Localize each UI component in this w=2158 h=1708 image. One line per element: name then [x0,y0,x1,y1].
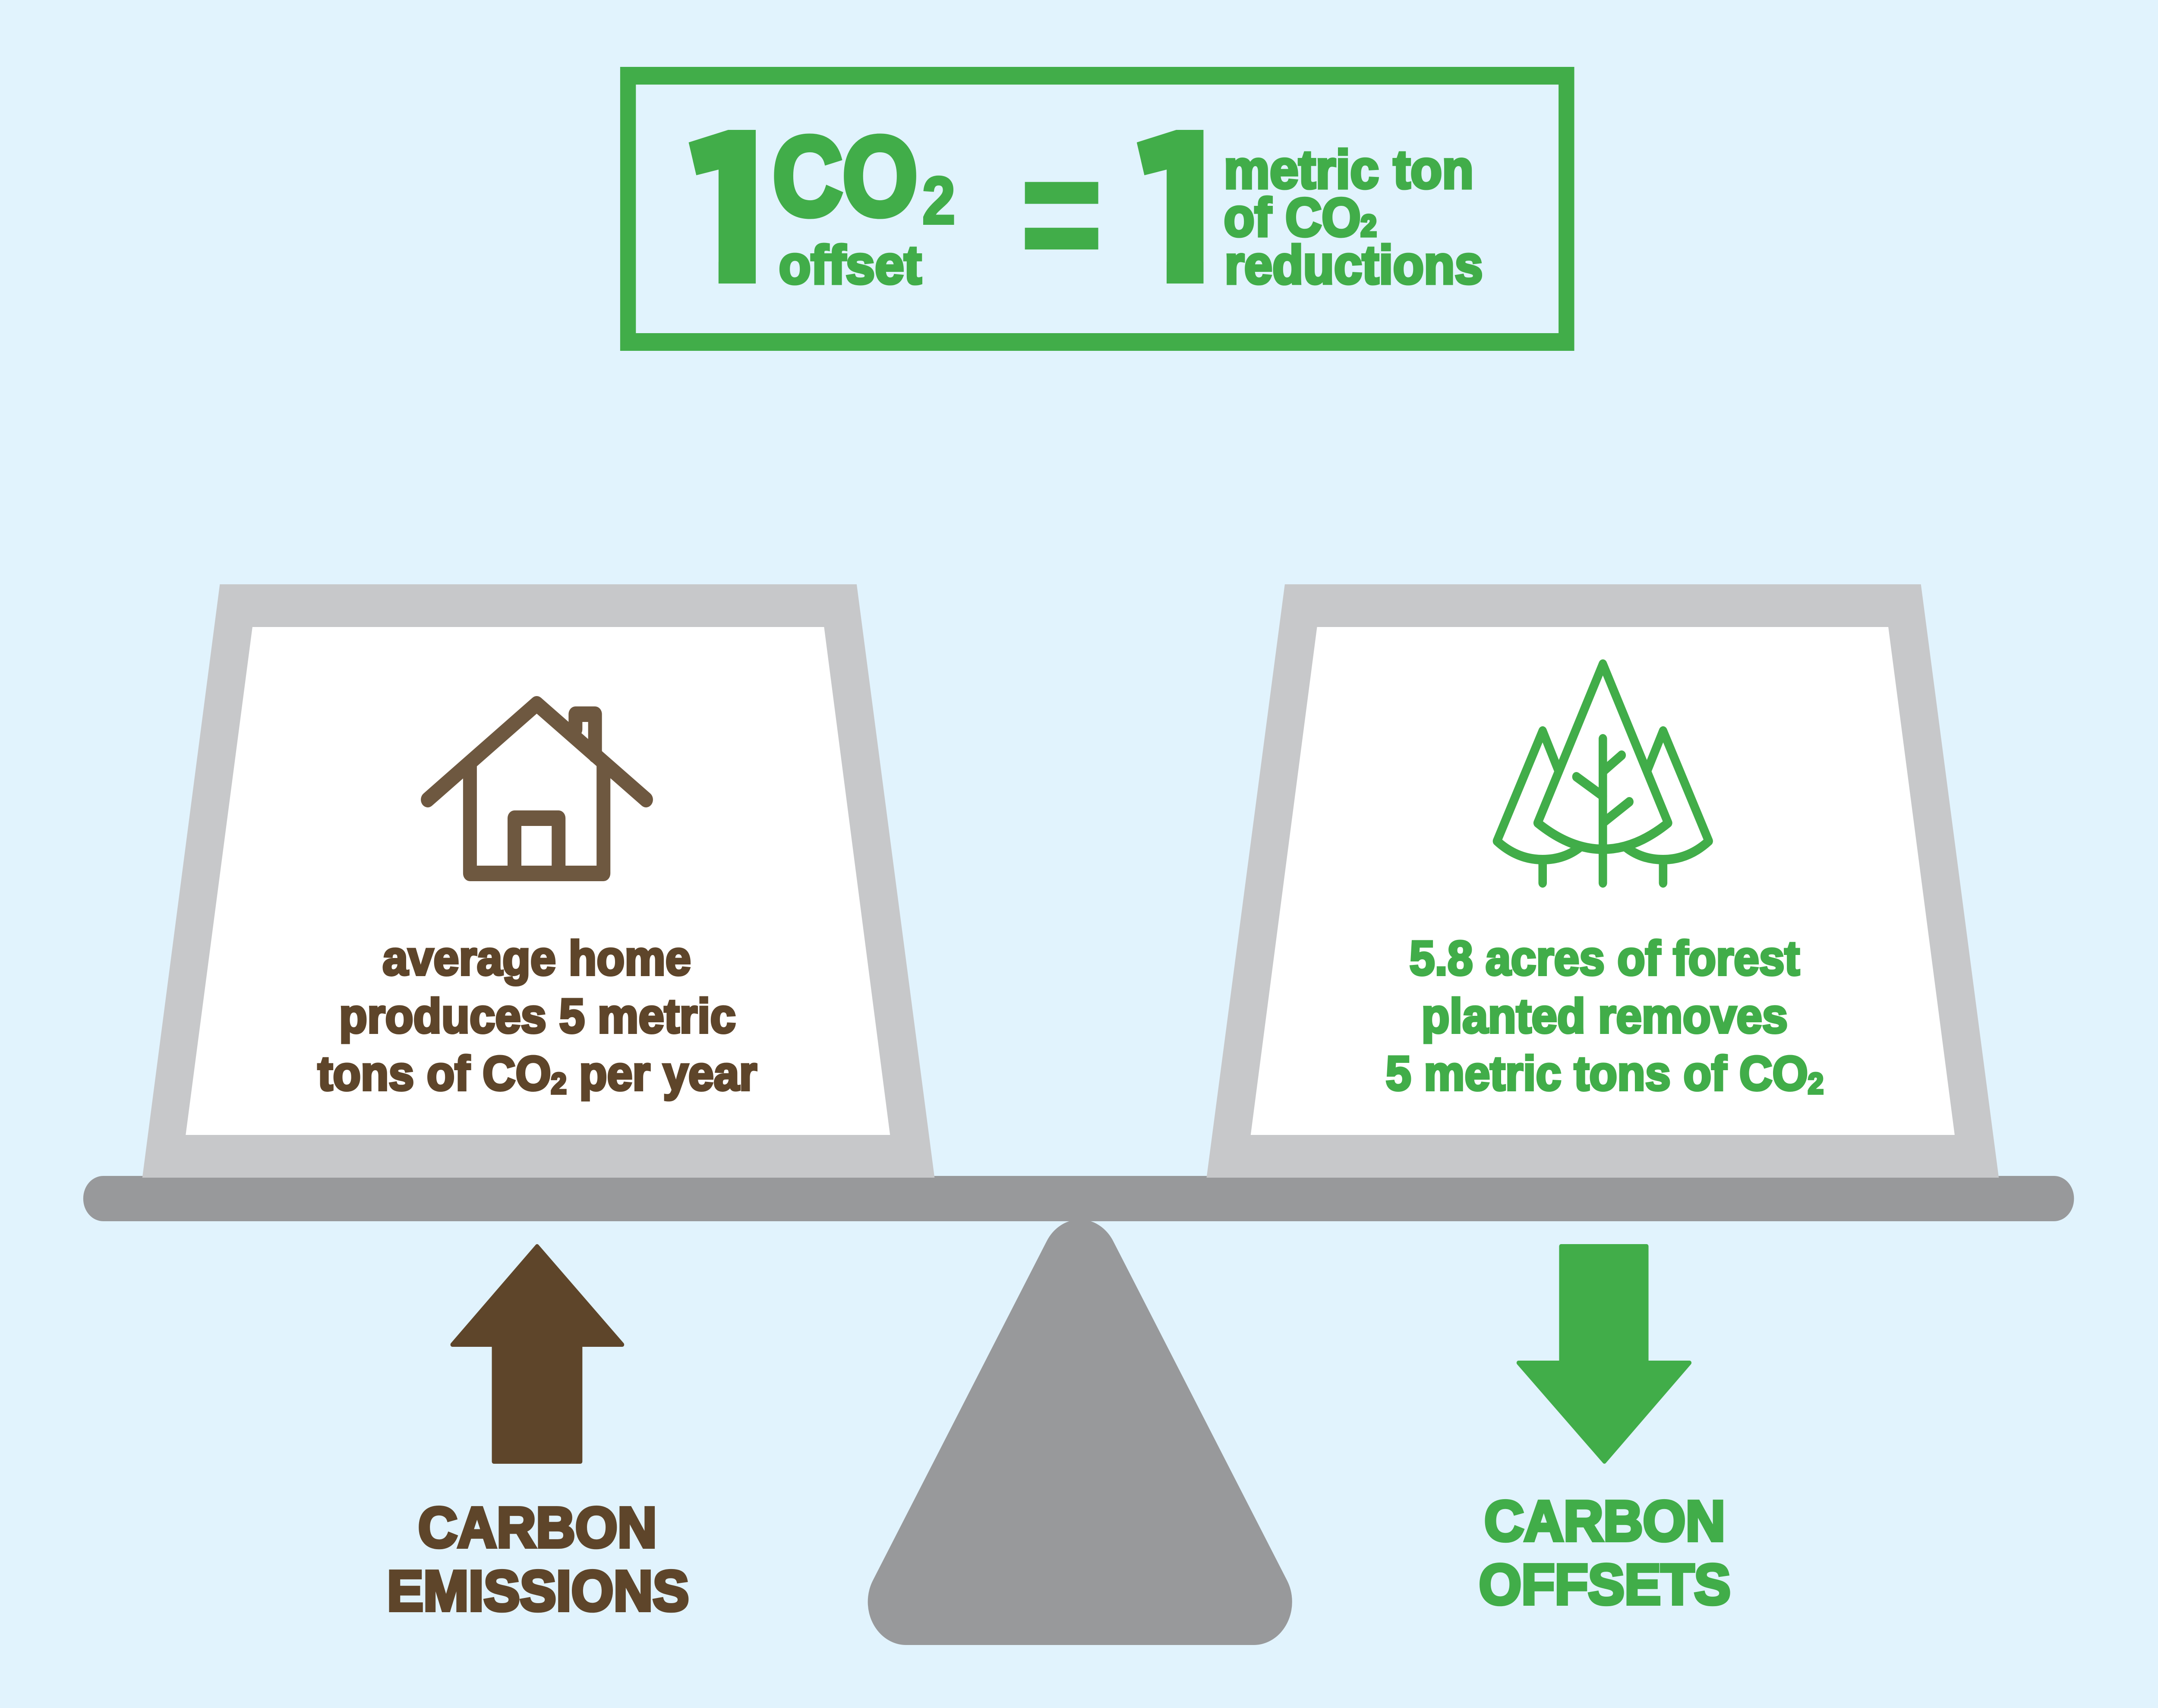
pan interior [1251,627,1955,1135]
metric ton of CO2 reductions: of CO2 [1224,188,1376,248]
arrow: up [452,1246,622,1462]
text: average home [318,932,757,1100]
text: average home: tons of CO [318,1047,537,1100]
label: carbon emissions: EMISSIONS [387,1560,689,1623]
icon: house [428,704,646,873]
panel: carbon emissions pan [142,584,934,1178]
metric ton of CO2 reductions: reductions [1224,235,1483,295]
text: forest [1386,932,1824,1100]
equals sign: = [1020,118,1103,308]
numeral 1 right: 1 [1127,92,1231,329]
label: carbon offsets: OFFSETS [1479,1553,1731,1617]
metric ton of CO2 reductions [1224,140,1483,295]
label: carbon offsets: CARBON [1484,1490,1725,1553]
fulcrum [906,1263,1254,1602]
box frame [628,76,1566,342]
offset label: offset [779,235,921,295]
balance beam [83,1176,2074,1221]
label: carbon emissions: CARBON [418,1496,657,1560]
text: forest: 5.8 acres of forest [1410,932,1800,985]
text: average home: produces 5 metric [339,990,736,1043]
panel: carbon offsets pan [1207,584,1999,1178]
metric ton of CO2 reductions: metric ton [1224,140,1473,200]
text: forest: 5 metric tons of CO [1386,1047,1782,1100]
text: average home: 2 [551,1067,567,1100]
text: average home: per year [567,1047,757,1100]
label: carbon offsets [1479,1490,1731,1617]
pan frame [1207,584,1999,1178]
icon: trees [1497,664,1709,883]
equation box [628,76,1566,342]
arrow: down [1518,1246,1690,1462]
numeral 1 left: 1 [679,92,782,329]
pan interior [186,627,890,1135]
text: forest: 2 [1808,1067,1824,1100]
CO2 large: 2 [922,163,955,238]
label: carbon emissions [387,1496,689,1623]
text: average home: average home [382,932,691,985]
pan frame [142,584,934,1178]
CO2 large: CO [773,113,918,239]
text: forest: planted removes [1421,990,1788,1043]
